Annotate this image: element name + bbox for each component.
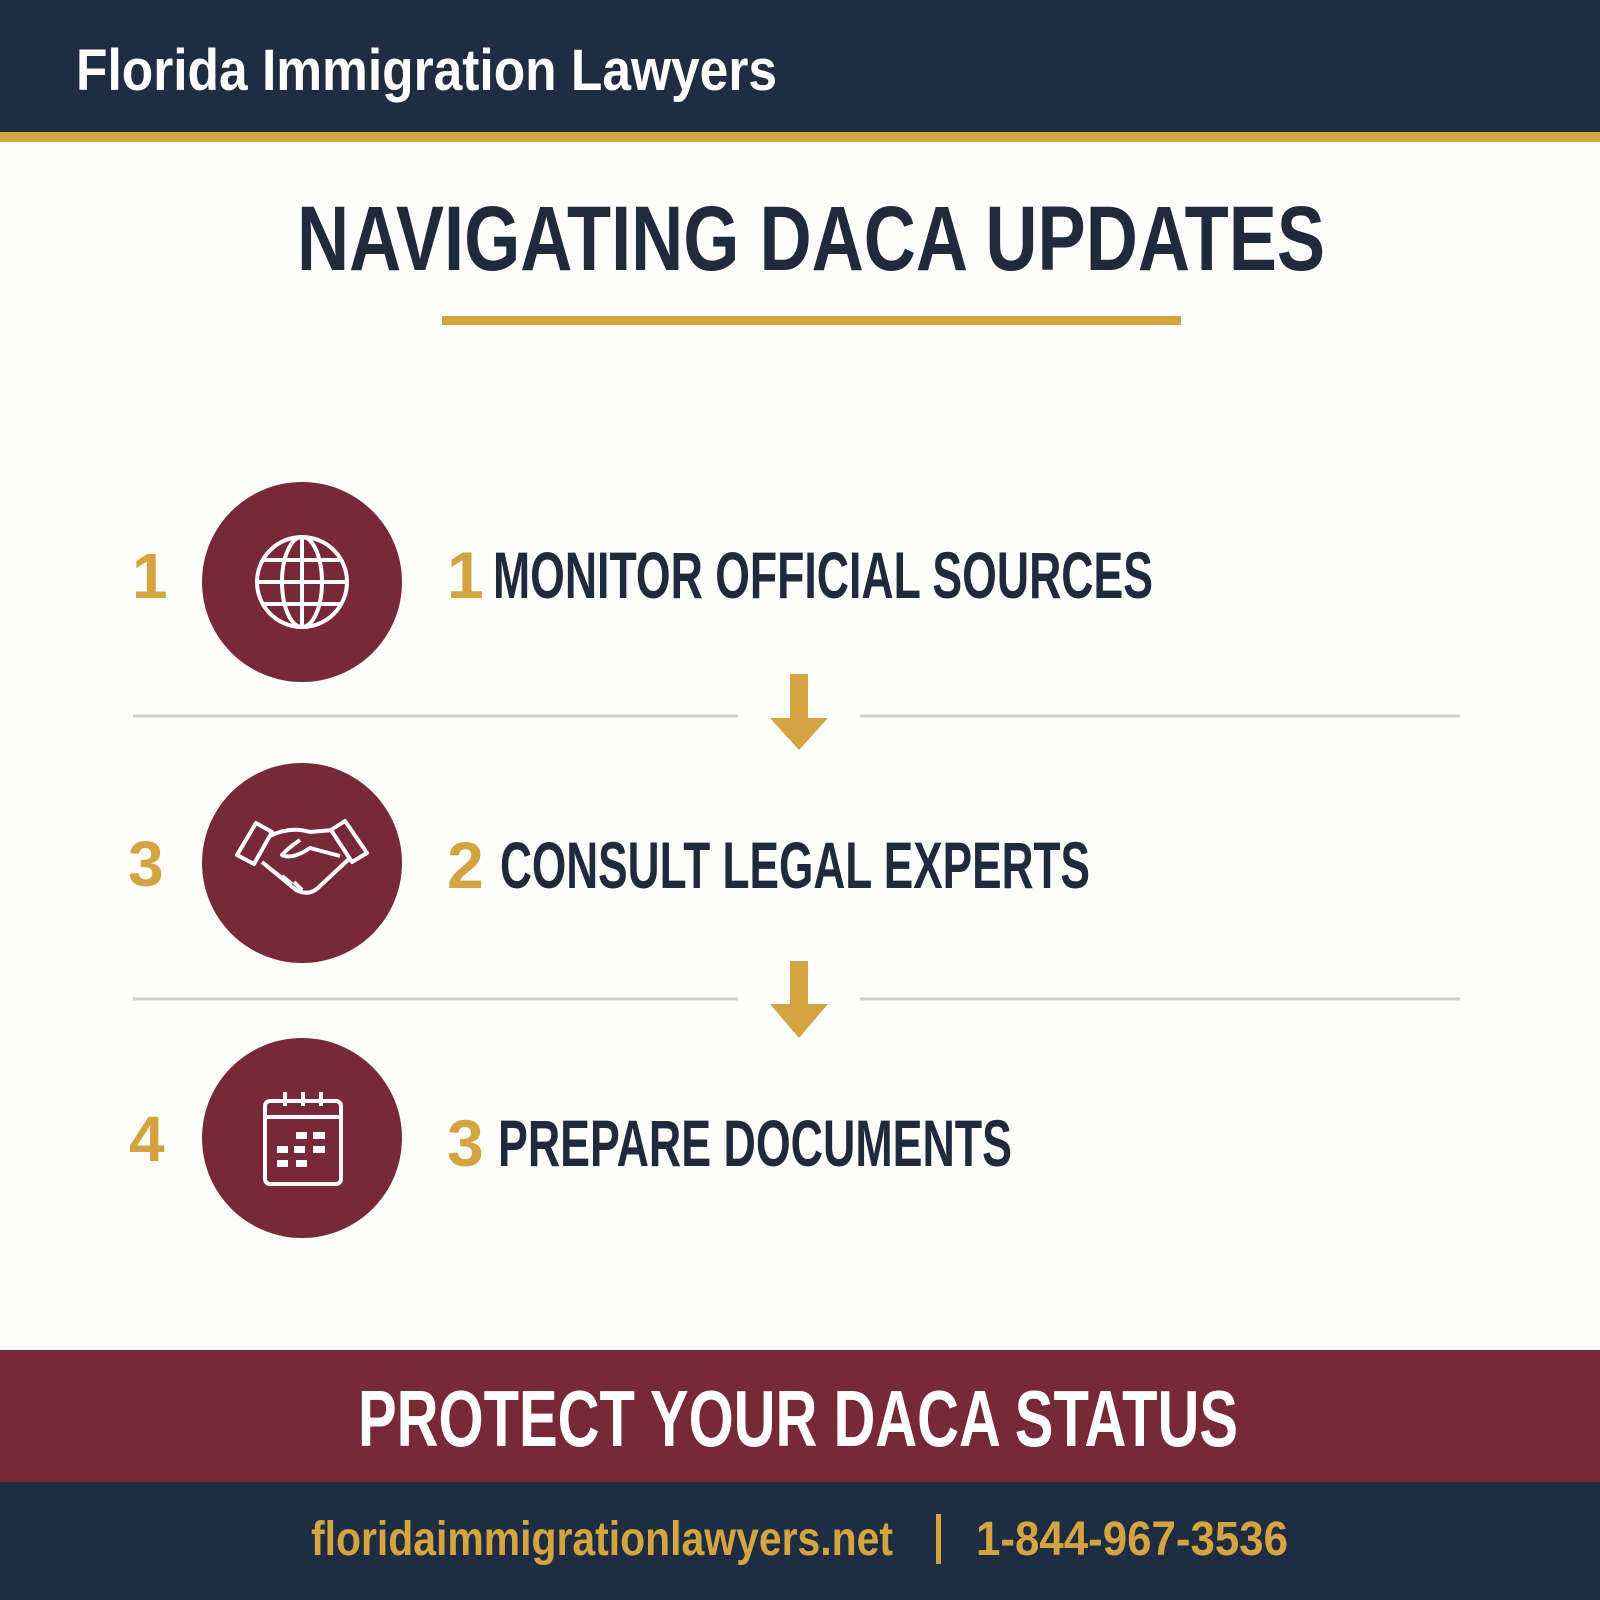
step 2: CONSULT LEGAL EXPERTS (500, 828, 1090, 902)
step 1: 1 (132, 540, 168, 612)
step 2: 3 (128, 828, 164, 900)
icon: calendar (265, 1092, 341, 1184)
step 3 (129, 1038, 1012, 1238)
step 2: 2 (447, 828, 484, 902)
step 3: 4 (129, 1103, 165, 1175)
title underline (442, 316, 1181, 325)
step 3: PREPARE DOCUMENTS (498, 1106, 1012, 1180)
step 1 (132, 482, 1153, 682)
header brand text: Florida Immigration Lawyers (76, 38, 777, 103)
icon: handshake (237, 821, 367, 893)
title (297, 188, 1325, 325)
icon: globe (257, 537, 347, 627)
step 1: MONITOR OFFICIAL SOURCES (493, 538, 1153, 612)
arrow 1 (133, 674, 1460, 750)
header bar (0, 0, 1600, 142)
step 1: 1 (447, 538, 484, 612)
banner: protect your status: PROTECT YOUR DACA STATUS (358, 1374, 1238, 1463)
banner: protect your status (0, 1350, 1600, 1483)
step 3: 3 (447, 1106, 484, 1180)
footer contact: floridaimmigrationlawyers.net (311, 1513, 893, 1566)
arrow 2 (133, 961, 1460, 1038)
footer contact: 1-844-967-3536 (976, 1513, 1288, 1566)
footer contact (0, 1482, 1600, 1600)
title: NAVIGATING DACA UPDATES (297, 188, 1325, 290)
step 2 (128, 763, 1090, 963)
